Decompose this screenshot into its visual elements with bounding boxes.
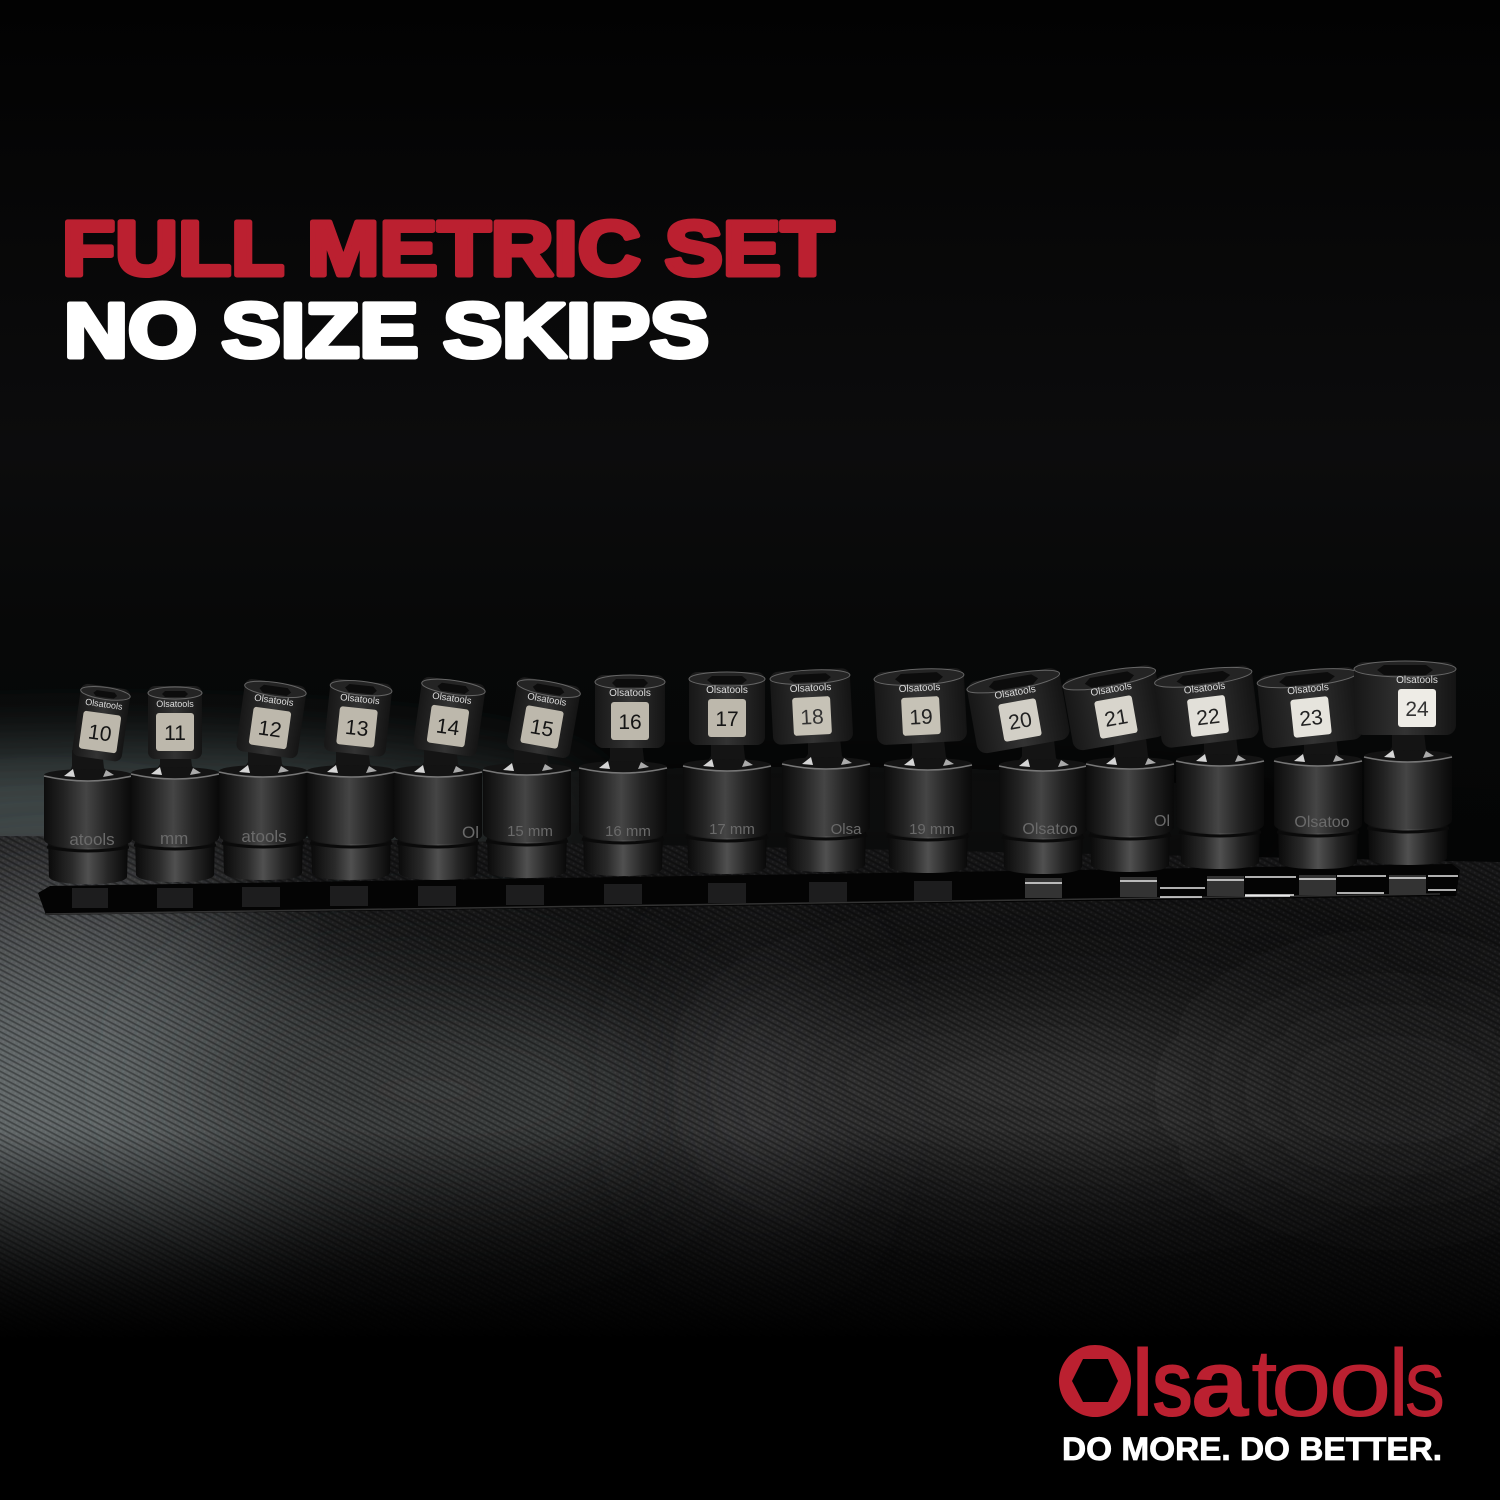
brand logo [1059, 1329, 1445, 1467]
socket 13: 13 [344, 716, 370, 741]
tagline: DO MORE. DO BETTER. [1062, 1431, 1442, 1467]
socket 13 [307, 678, 395, 880]
logo wordmark: o [1270, 1329, 1332, 1436]
socket 22: 22 [1195, 705, 1221, 730]
socket 12: Olsatools [253, 693, 294, 709]
socket 20: 20 [1007, 708, 1034, 735]
socket 17: 17 [715, 708, 739, 731]
socket 23: Olsatools [1287, 682, 1329, 697]
socket 22 [1154, 663, 1264, 869]
socket 17: 17 mm [709, 821, 755, 838]
icon: hexagon O [1059, 1345, 1131, 1417]
socket 19 [874, 667, 972, 873]
socket 21 [1062, 663, 1174, 872]
socket 20 [966, 666, 1087, 874]
socket 12: atools [241, 827, 287, 846]
socket 14: Olsatools [431, 691, 472, 707]
logo wordmark: s [1151, 1330, 1194, 1437]
logo wordmark [1132, 1329, 1445, 1437]
logo wordmark: s [1404, 1329, 1445, 1436]
socket 21: 21 [1103, 705, 1130, 732]
heading line: full metric set: FULL METRIC SET [62, 206, 834, 292]
socket 16 [579, 675, 667, 876]
socket 15: 15 mm [507, 823, 553, 840]
socket 20: Olsatoo [1022, 821, 1078, 838]
socket 11 [131, 686, 219, 882]
socket 18: Olsatools [789, 682, 832, 695]
logo wordmark: l [1132, 1330, 1153, 1437]
socket rail [38, 864, 1460, 915]
socket 14: Ol [462, 823, 479, 842]
socket 12: 12 [257, 716, 283, 742]
socket 24: Olsatools [1396, 675, 1438, 686]
socket 10: Olsatools [85, 697, 124, 712]
socket 13: Olsatools [340, 692, 380, 707]
logo wordmark: l [1388, 1330, 1409, 1437]
socket 15: Olsatools [526, 691, 567, 709]
socket 10 [44, 683, 132, 884]
socket 23: Olsatoo [1294, 814, 1350, 831]
socket 15: 15 [528, 715, 555, 742]
socket 19: 19 mm [909, 821, 955, 838]
socket 17: Olsatools [706, 685, 748, 696]
socket 20: Olsatools [994, 684, 1037, 702]
socket 19: 19 [909, 705, 933, 730]
logo wordmark: a [1191, 1330, 1250, 1437]
heading [62, 206, 834, 374]
socket 16: 16 [618, 711, 642, 734]
socket 22: Olsatools [1183, 681, 1226, 697]
socket 21: Olsatools [1090, 681, 1133, 699]
socket 10: 10 [87, 720, 113, 746]
socket 19: Olsatools [898, 682, 941, 695]
socket 21: Ol [1154, 813, 1170, 830]
socket 23 [1256, 665, 1364, 869]
logo wordmark: o [1328, 1330, 1392, 1437]
socket 23: 23 [1298, 706, 1324, 731]
socket 18 [770, 668, 870, 872]
socket 24: 24 [1405, 698, 1429, 721]
socket 11: Olsatools [156, 699, 194, 709]
socket 12 [219, 678, 307, 880]
heading line: no size skips: NO SIZE SKIPS [64, 288, 709, 374]
socket 18: Olsa [831, 821, 862, 838]
socket 10: atools [69, 830, 115, 849]
socket 15 [483, 676, 582, 878]
socket 14 [394, 676, 486, 880]
socket 16: 16 mm [605, 823, 651, 840]
socket 14: 14 [435, 714, 461, 741]
socket 18: 18 [800, 705, 824, 730]
socket 24 [1354, 661, 1456, 865]
socket 17 [683, 672, 771, 874]
socket 16: Olsatools [609, 688, 651, 699]
socket 11: 11 [164, 722, 186, 745]
socket 11: mm [160, 829, 188, 848]
logo wordmark: t [1251, 1330, 1278, 1437]
